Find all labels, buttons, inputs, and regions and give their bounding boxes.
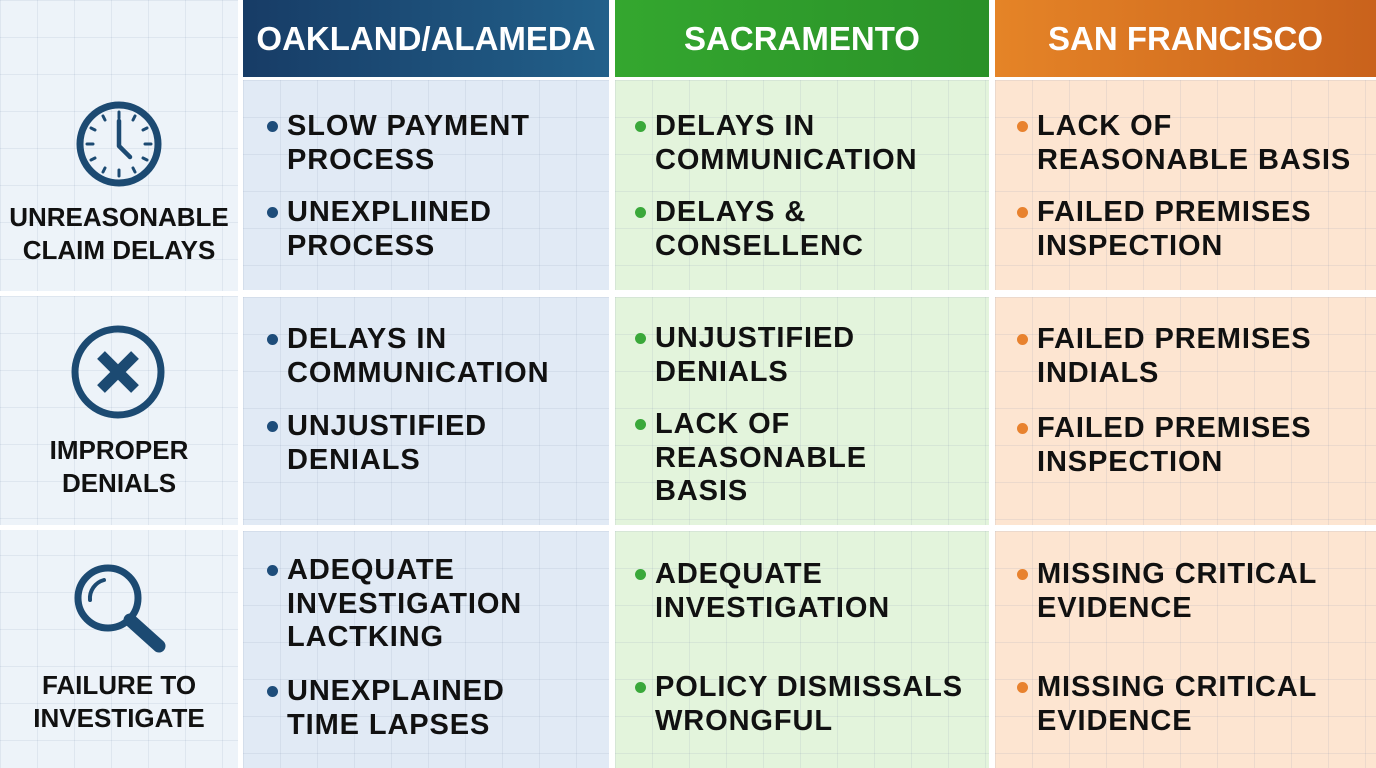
text: DENIALS <box>655 356 789 388</box>
icon: magnifier <box>74 564 166 652</box>
text: INVESTIGATION <box>655 592 890 624</box>
text: POLICY DISMISSALS <box>655 671 963 703</box>
San Francisco items: REASONABLE BASIS <box>1037 144 1351 176</box>
text: LACK OF <box>655 408 790 440</box>
text: UNJUSTIFIED <box>655 322 855 354</box>
left column background <box>0 0 238 768</box>
text: TIME LAPSES <box>287 708 490 740</box>
label: improper denials <box>50 435 188 498</box>
text: FAILED PREMISES <box>1037 196 1312 228</box>
text: INSPECTION <box>1037 230 1223 262</box>
Oakland items: PROCESS <box>287 144 435 176</box>
text: CONSELLENC <box>655 230 864 262</box>
text: FAILED PREMISES <box>1037 412 1312 444</box>
header: Oakland/Alameda <box>243 0 609 77</box>
header: San Francisco <box>995 0 1376 77</box>
text: LACTKING <box>287 621 444 653</box>
icon: clock <box>76 102 162 186</box>
San Francisco items: LACK OF <box>1037 110 1172 142</box>
label: unreasonable claim delays: UNREASONABLE <box>9 202 229 232</box>
text: BASIS <box>655 475 748 507</box>
Sacramento items <box>635 110 917 176</box>
cells backgrounds <box>243 80 609 290</box>
text: MISSING CRITICAL <box>1037 671 1317 703</box>
text: COMMUNICATION <box>287 356 549 388</box>
Sacramento items: COMMUNICATION <box>655 144 917 176</box>
header: Sacramento <box>615 0 989 77</box>
text: MISSING CRITICAL <box>1037 558 1317 590</box>
text: INDIALS <box>1037 356 1159 388</box>
San Francisco items <box>1017 110 1351 176</box>
text: REASONABLE <box>655 442 867 474</box>
text: WRONGFUL <box>655 704 833 736</box>
label: unreasonable claim delays: CLAIM DELAYS <box>23 235 215 265</box>
Oakland items <box>267 110 530 176</box>
text: DELAYS IN <box>287 323 447 355</box>
header: Oakland/Alameda: OAKLAND/ALAMEDA <box>256 20 596 56</box>
text: DELAYS & <box>655 196 806 228</box>
text: EVIDENCE <box>1037 704 1192 736</box>
text: FAILED PREMISES <box>1037 323 1312 355</box>
text: INSPECTION <box>1037 446 1223 478</box>
label: failure to investigate: FAILURE TO <box>42 670 196 700</box>
text: DENIALS <box>287 444 421 476</box>
text: PROCESS <box>287 230 435 262</box>
label: failure to investigate: INVESTIGATE <box>33 703 205 733</box>
icon: x circle <box>72 326 164 418</box>
label: improper denials: DENIALS <box>62 468 176 498</box>
Oakland items: SLOW PAYMENT <box>287 110 530 142</box>
text: INVESTIGATION <box>287 588 522 620</box>
text: UNJUSTIFIED <box>287 410 487 442</box>
Sacramento items: DELAYS IN <box>655 110 815 142</box>
text: ADEQUATE <box>655 558 823 590</box>
label: unreasonable claim delays <box>9 202 229 265</box>
label: improper denials: IMPROPER <box>50 435 188 465</box>
text: UNEXPLAINED <box>287 675 505 707</box>
text: ADEQUATE <box>287 554 455 586</box>
label: failure to investigate <box>33 670 205 733</box>
header: San Francisco: SAN FRANCISCO <box>1048 20 1323 56</box>
header: Sacramento: SACRAMENTO <box>684 20 920 56</box>
text: EVIDENCE <box>1037 592 1192 624</box>
text: UNEXPLIINED <box>287 196 492 228</box>
